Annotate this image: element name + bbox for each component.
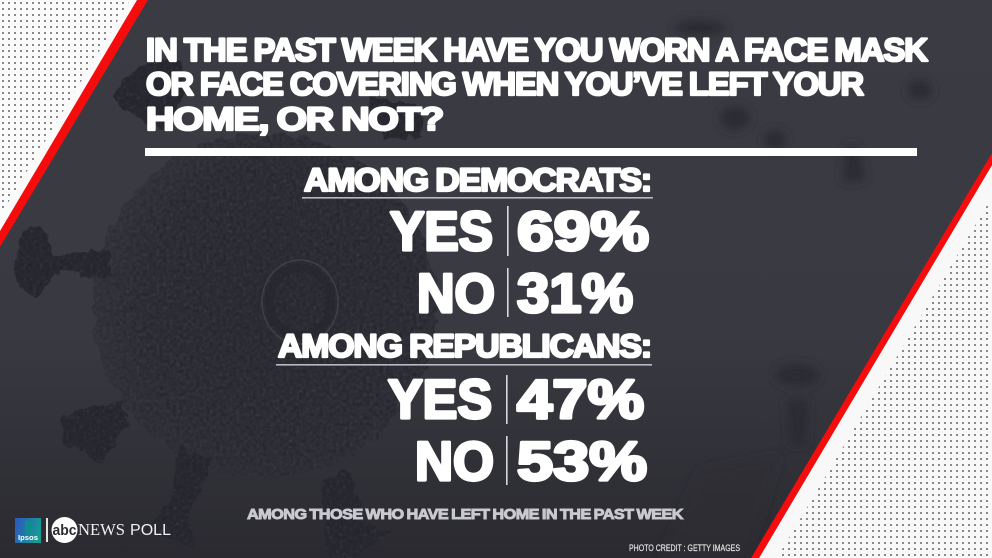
top-left red stripe bbox=[0, 0, 148, 247]
top-left white dotted corner bbox=[0, 0, 139, 232]
logo: abc news poll bbox=[52, 517, 171, 543]
democrats heading rule bbox=[302, 197, 653, 199]
democrats no row bbox=[417, 262, 633, 324]
title rule bbox=[145, 148, 917, 156]
logo: ipsos: Ipsos bbox=[18, 533, 38, 542]
footnote: AMONG THOSE WHO HAVE LEFT HOME IN THE PAST WEEK bbox=[247, 506, 684, 523]
title: IN THE PAST WEEK HAVE YOU WORN A FACE MASK bbox=[146, 32, 928, 68]
logo divider bbox=[46, 518, 48, 542]
panel: democrats bbox=[302, 162, 653, 324]
democrats no row: NO bbox=[417, 262, 495, 324]
title: OR FACE COVERING WHEN YOU’VE LEFT YOUR bbox=[146, 66, 864, 102]
democrats heading: AMONG DEMOCRATS: bbox=[304, 162, 651, 198]
democrats yes row: 69% bbox=[517, 200, 649, 262]
republicans heading: AMONG REPUBLICANS: bbox=[278, 328, 651, 364]
logo: abc news poll: NEWS bbox=[78, 520, 125, 539]
republicans heading rule bbox=[276, 364, 652, 366]
logo: ipsos bbox=[15, 518, 41, 543]
bottom-right white dotted corner bbox=[759, 165, 992, 558]
republicans yes row: 47% bbox=[517, 368, 644, 430]
republicans no row: NO bbox=[415, 430, 494, 492]
republicans no row: 53% bbox=[517, 430, 647, 492]
democrats yes row: YES bbox=[390, 200, 493, 262]
logo: abc news poll: abc bbox=[52, 522, 76, 539]
logo: abc news poll: POLL bbox=[130, 522, 171, 539]
title: HOME, OR NOT? bbox=[146, 101, 443, 137]
photo credit: PHOTO CREDIT : GETTY IMAGES bbox=[629, 543, 740, 554]
bottom-right red stripe bbox=[751, 153, 992, 558]
democrats yes row bbox=[390, 200, 649, 262]
panel: republicans bbox=[276, 328, 652, 492]
republicans yes row bbox=[388, 368, 644, 430]
democrats no row: 31% bbox=[517, 262, 633, 324]
republicans no row bbox=[415, 430, 647, 492]
title bbox=[146, 32, 928, 137]
republicans yes row: YES bbox=[388, 368, 492, 430]
